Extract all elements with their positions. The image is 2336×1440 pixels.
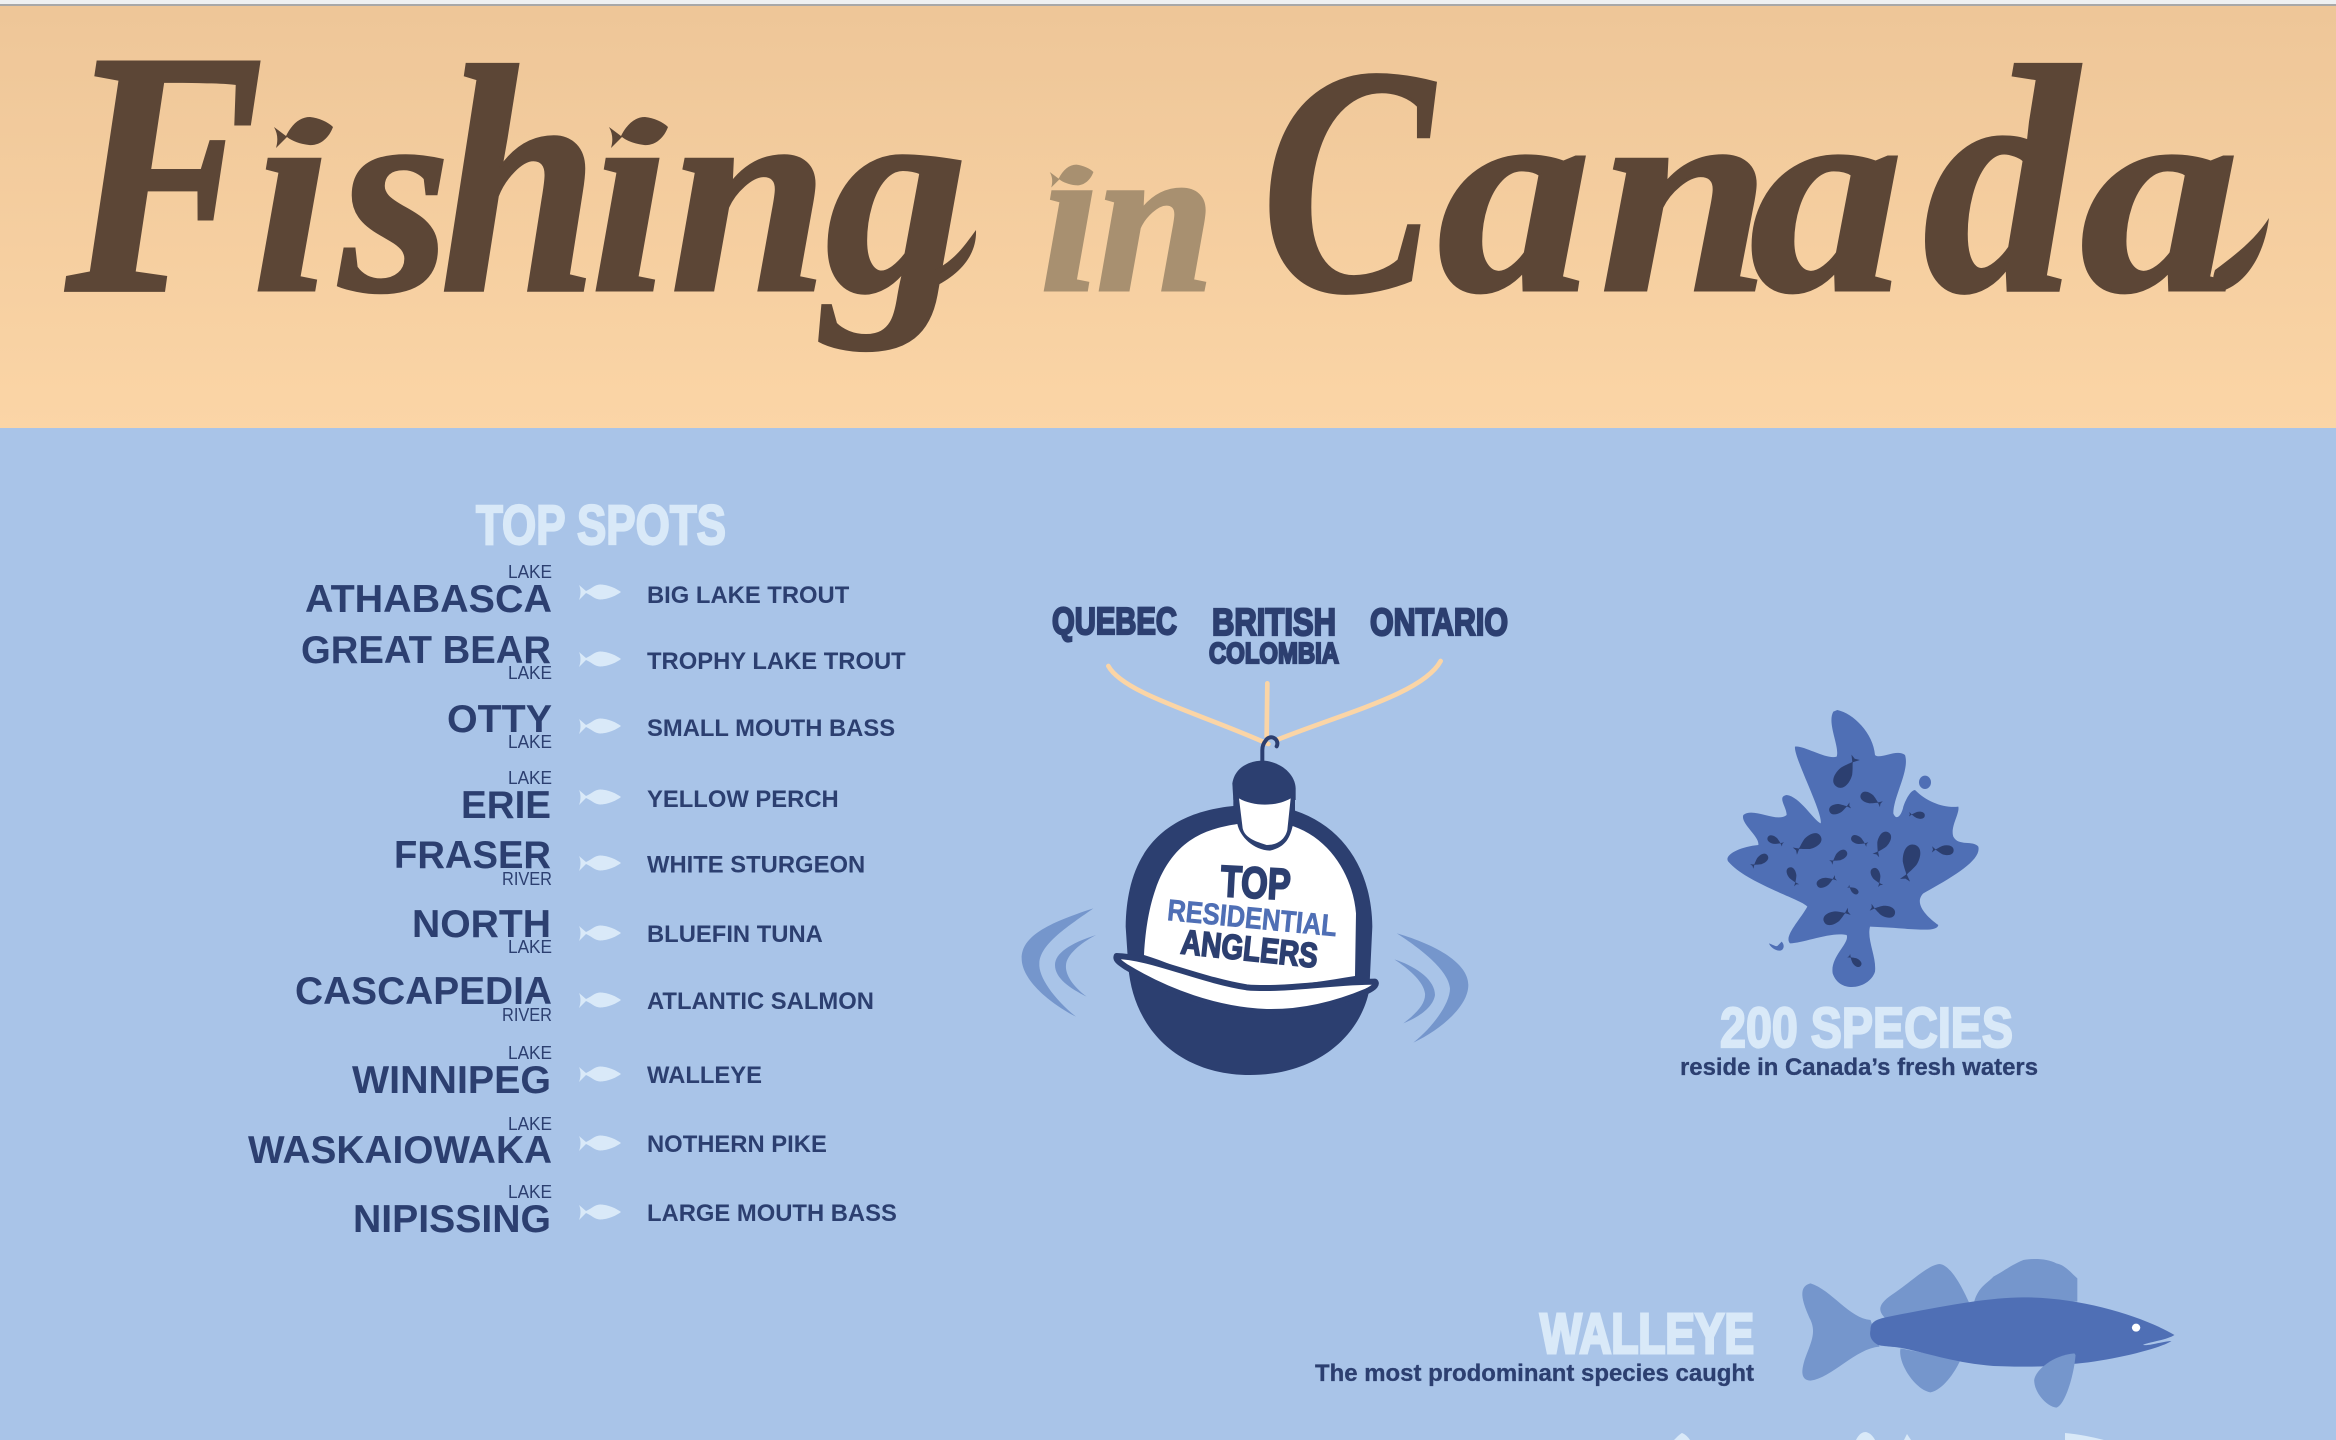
row: Fraser: RIVER — [502, 869, 552, 889]
row: Athabasca — [305, 562, 850, 621]
icon: fins and tail — [1802, 1259, 2077, 1392]
icon: fishing lines — [1108, 661, 1441, 744]
row: Winnipeg — [352, 1043, 762, 1102]
text: top: TOP — [1219, 857, 1292, 910]
icon: fishing bobber — [1022, 661, 1468, 1075]
icon: fish dot on first i — [274, 117, 333, 148]
title: in: in — [1040, 100, 1215, 337]
row: Great Bear — [301, 629, 906, 683]
row: Erie: ERIE — [461, 784, 551, 827]
icon: bobber neck — [1239, 798, 1291, 845]
label: Ontario: ONTARIO — [1370, 602, 1508, 644]
icon: maple leaf — [1727, 710, 1979, 987]
row: Waskaiowaka — [248, 1114, 827, 1172]
row: Fraser: WHITE STURGEON — [647, 852, 865, 878]
heading: 200 species: 200 SPECIES — [1720, 996, 2013, 1060]
row: Otty — [447, 698, 895, 752]
title: Canada: a — [2080, 37, 2240, 352]
text: walleye note: The most prodominant species caught — [1315, 1360, 1754, 1387]
title: Canada: d — [1923, 2, 2082, 361]
icon: fish dot on in — [1050, 165, 1093, 188]
text: residential: RESIDENTIAL — [1166, 894, 1338, 943]
title: Fishing — [64, 60, 962, 352]
row: Waskaiowaka: WASKAIOWAKA — [248, 1129, 552, 1172]
row: Nipissing: NIPISSING — [353, 1198, 551, 1241]
icon: swash on final a — [2213, 218, 2269, 290]
title: Canada: ana — [1437, 37, 1904, 352]
row: North — [412, 903, 823, 957]
row: Waskaiowaka: NOTHERN PIKE — [647, 1131, 827, 1158]
icon: bobber body — [1126, 797, 1372, 1075]
icon: bobber brim — [1116, 956, 1376, 1012]
icon: left ripples — [1022, 908, 1096, 1017]
row: Athabasca: BIG LAKE TROUT — [647, 582, 850, 609]
row: Nipissing: LAKE — [508, 1182, 552, 1202]
title: Fishing: h — [440, 2, 599, 361]
icon: maple leaf with fish — [1727, 710, 1979, 987]
panel: top residential anglers — [1022, 601, 1508, 1075]
title: Canada — [1262, 1, 2240, 361]
label: British Colombia — [1209, 602, 1339, 670]
row: Athabasca: ATHABASCA — [305, 578, 552, 621]
row: Waskaiowaka: LAKE — [508, 1114, 552, 1134]
title: Fishing: is — [252, 36, 451, 352]
icon: swash on g — [932, 230, 976, 288]
row: Winnipeg: LAKE — [508, 1043, 552, 1063]
panel: 200 species — [1680, 710, 2038, 1081]
row: Cascapedia — [295, 970, 874, 1025]
row: Erie: YELLOW PERCH — [647, 786, 839, 813]
row: Fraser: FRASER — [394, 834, 551, 877]
row: Erie — [461, 768, 839, 827]
row: Nipissing — [353, 1182, 897, 1241]
panel: top spots — [248, 494, 906, 1241]
row: Athabasca: LAKE — [508, 562, 552, 582]
row: Fraser — [394, 834, 865, 889]
title: Canada: C — [1262, 1, 1438, 361]
icon: ring and stem — [1262, 737, 1277, 763]
row: North: LAKE — [508, 937, 552, 957]
icon: school of fish — [1749, 753, 1954, 969]
title: Fishing: ing — [590, 36, 968, 352]
icon: bobber cap — [1232, 761, 1296, 800]
row: North: BLUEFIN TUNA — [647, 921, 823, 948]
row: Winnipeg: WALLEYE — [647, 1062, 762, 1089]
panel: walleye — [1315, 1259, 2174, 1408]
row: Great Bear: TROPHY LAKE TROUT — [647, 648, 906, 675]
row: Great Bear: GREAT BEAR — [301, 629, 551, 672]
icon: pectoral fin — [2034, 1353, 2076, 1408]
icon: right ripples — [1394, 933, 1468, 1043]
icon: eye — [2132, 1324, 2140, 1332]
label: British Colombia: BRITISH — [1212, 602, 1336, 644]
text: fresh waters note: reside in Canada’s fresh waters — [1680, 1054, 2038, 1081]
row: Cascapedia: RIVER — [502, 1005, 552, 1025]
label: Quebec: QUEBEC — [1052, 601, 1177, 643]
row: Cascapedia: ATLANTIC SALMON — [647, 988, 874, 1015]
row: Erie: LAKE — [508, 768, 552, 788]
row: Winnipeg: WINNIPEG — [352, 1059, 551, 1102]
row: Nipissing: LARGE MOUTH BASS — [647, 1200, 897, 1227]
icon: fish dot on second i — [609, 117, 668, 148]
label: British Colombia: COLOMBIA — [1209, 638, 1339, 670]
icon: walleye fish — [1802, 1259, 2174, 1408]
icon: bobber white panel — [1144, 824, 1356, 987]
row: Great Bear: LAKE — [508, 663, 552, 683]
row: Otty: OTTY — [447, 698, 552, 741]
heading: top spots: TOP SPOTS — [476, 494, 726, 556]
row: Cascapedia: CASCAPEDIA — [295, 970, 552, 1013]
text: anglers: ANGLERS — [1179, 923, 1320, 976]
row: Otty: LAKE — [508, 732, 552, 752]
panel: title banner — [0, 0, 2336, 428]
heading: walleye: WALLEYE — [1540, 1302, 1754, 1366]
row: Otty: SMALL MOUTH BASS — [647, 715, 895, 742]
row: North: NORTH — [412, 903, 551, 946]
icon: leaf fragments — [1769, 776, 1931, 951]
icon: fish body — [1870, 1297, 2174, 1367]
decorative tips at bottom edge — [1674, 1432, 2104, 1440]
